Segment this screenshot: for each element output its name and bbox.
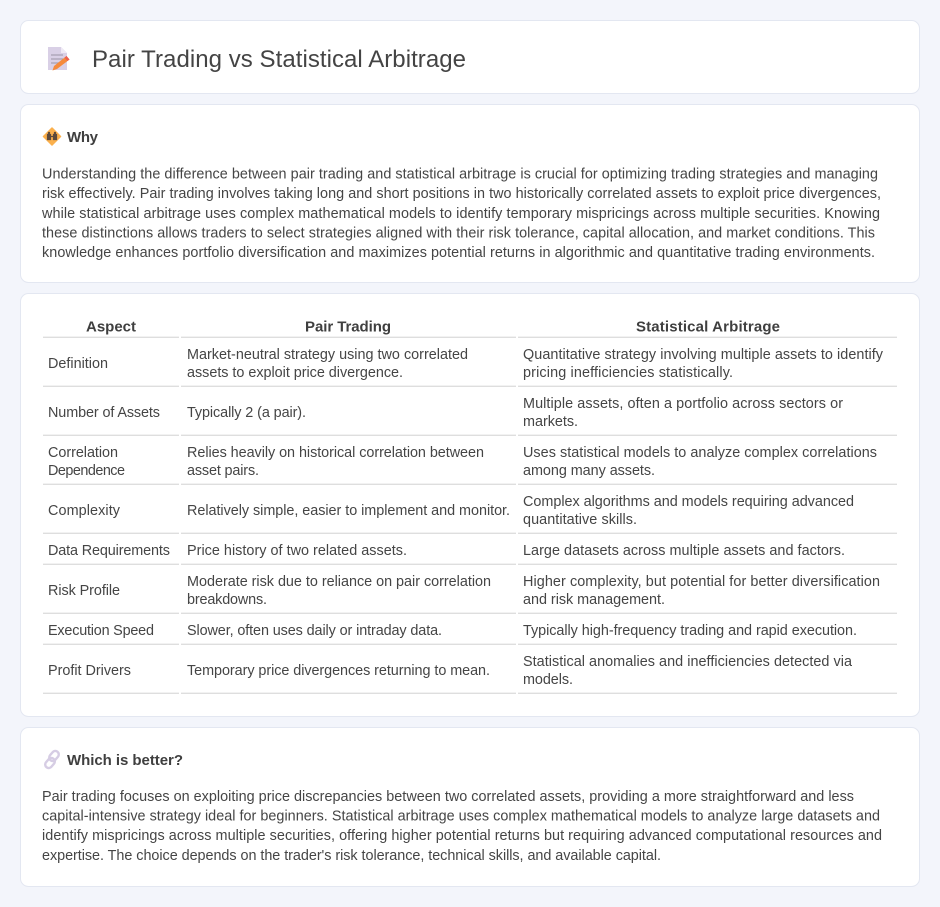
panel: header xyxy=(20,20,920,94)
row: data requirements: Price history of two related assets. xyxy=(187,543,407,559)
row: number of assets: Multiple assets, often a portfolio across sectors or xyxy=(523,396,843,412)
row: risk profile: Risk Profile xyxy=(48,583,120,599)
row: profit drivers: Statistical anomalies and inefficiencies detected via xyxy=(523,654,852,670)
row: risk profile: and risk management. xyxy=(523,592,665,608)
icon: warning diamond xyxy=(44,128,60,145)
row: execution speed: Slower, often uses daily or intraday data. xyxy=(187,623,442,639)
text block: verdict: expertise. The choice depends on the trader's risk tolerance, technical skills, and available capital. xyxy=(42,848,661,864)
panel: comparison table xyxy=(20,294,920,716)
row: risk profile: Moderate risk due to reliance on pair correlation xyxy=(187,574,491,590)
title: Pair Trading vs Statistical Arbitrage xyxy=(92,46,466,73)
row: correlation dependence: Relies heavily on historical correlation between xyxy=(187,445,484,461)
row: complexity: Complexity xyxy=(48,503,121,519)
icon: memo with pencil xyxy=(48,47,70,70)
row: profit drivers: Temporary price divergences returning to mean. xyxy=(187,663,490,679)
row: definition: pricing inefficiencies statistically. xyxy=(523,365,733,381)
row: definition: Market-neutral strategy using two correlated xyxy=(187,347,468,363)
heading: which is better: Which is better? xyxy=(67,752,183,769)
row: data requirements xyxy=(43,543,897,565)
table header row: Statistical Arbitrage xyxy=(636,318,780,336)
row: execution speed xyxy=(43,623,897,645)
row: execution speed: Typically high-frequency trading and rapid execution. xyxy=(523,623,857,639)
row: number of assets: Number of Assets xyxy=(48,405,160,421)
row: complexity xyxy=(43,494,897,534)
row: definition xyxy=(43,347,897,387)
row: number of assets: markets. xyxy=(523,414,578,430)
heading: why: Why xyxy=(67,129,99,146)
row: correlation dependence: Correlation xyxy=(48,445,118,461)
panel: why xyxy=(20,104,920,282)
text block: why explanation: knowledge enhances portfolio diversification and maximizes potential returns in algorithmic and quantitative trading environments. xyxy=(42,245,875,261)
row: number of assets: Typically 2 (a pair). xyxy=(187,405,306,421)
text block: verdict: Pair trading focuses on exploiting price discrepancies between two correlated assets, providing a more straightforward and less xyxy=(42,789,854,805)
row: complexity: Complex algorithms and models requiring advanced xyxy=(523,494,854,510)
row: correlation dependence xyxy=(43,445,897,485)
row: number of assets xyxy=(43,396,897,436)
text block: verdict xyxy=(42,789,882,864)
table header row: Pair Trading xyxy=(305,318,391,336)
row: data requirements: Large datasets across multiple assets and factors. xyxy=(523,543,845,559)
text block: verdict: identify mispricings across multiple securities, offering higher potential returns but requiring advanced computational resources and xyxy=(42,828,882,844)
row: correlation dependence: asset pairs. xyxy=(187,463,259,479)
row: profit drivers: models. xyxy=(523,672,573,688)
row: profit drivers xyxy=(43,654,897,694)
row: profit drivers: Profit Drivers xyxy=(48,663,131,679)
text block: why explanation: these distinctions allows traders to select strategies aligned with their risk tolerance, capital allocation, and market conditions. This xyxy=(42,225,875,241)
panel: which is better xyxy=(20,728,920,886)
row: complexity: quantitative skills. xyxy=(523,512,637,528)
row: definition: Definition xyxy=(48,356,108,372)
text block: verdict: capital-intensive strategy ideal for beginners. Statistical arbitrage uses complex mathematical models to analyze large datasets and xyxy=(42,809,880,825)
row: risk profile: breakdowns. xyxy=(187,592,267,608)
table header row: Aspect xyxy=(86,318,136,336)
text block: why explanation: risk effectively. Pair trading involves taking long and short positions in two historically correlated assets to exploit price divergences, xyxy=(42,186,881,202)
row: risk profile: Higher complexity, but potential for better diversification xyxy=(523,574,880,590)
row: risk profile xyxy=(43,574,897,614)
icon: link xyxy=(44,750,60,769)
table header row xyxy=(43,318,897,338)
row: complexity: Relatively simple, easier to implement and monitor. xyxy=(187,503,510,519)
row: correlation dependence: Dependence xyxy=(48,463,125,479)
row: correlation dependence: Uses statistical models to analyze complex correlations xyxy=(523,445,877,461)
row: correlation dependence: among many assets. xyxy=(523,463,655,479)
text block: why explanation: while statistical arbitrage uses complex mathematical models to identify temporary mispricings across multiple securities. Knowing xyxy=(41,206,880,222)
row: definition: assets to exploit price divergence. xyxy=(187,365,403,381)
text block: why explanation xyxy=(41,167,881,261)
text block: why explanation: Understanding the difference between pair trading and statistical arbitrage is crucial for optimizing trading strategies and managing xyxy=(42,167,878,183)
row: data requirements: Data Requirements xyxy=(48,543,170,559)
row: definition: Quantitative strategy involving multiple assets to identify xyxy=(523,347,884,363)
row: execution speed: Execution Speed xyxy=(48,623,154,639)
